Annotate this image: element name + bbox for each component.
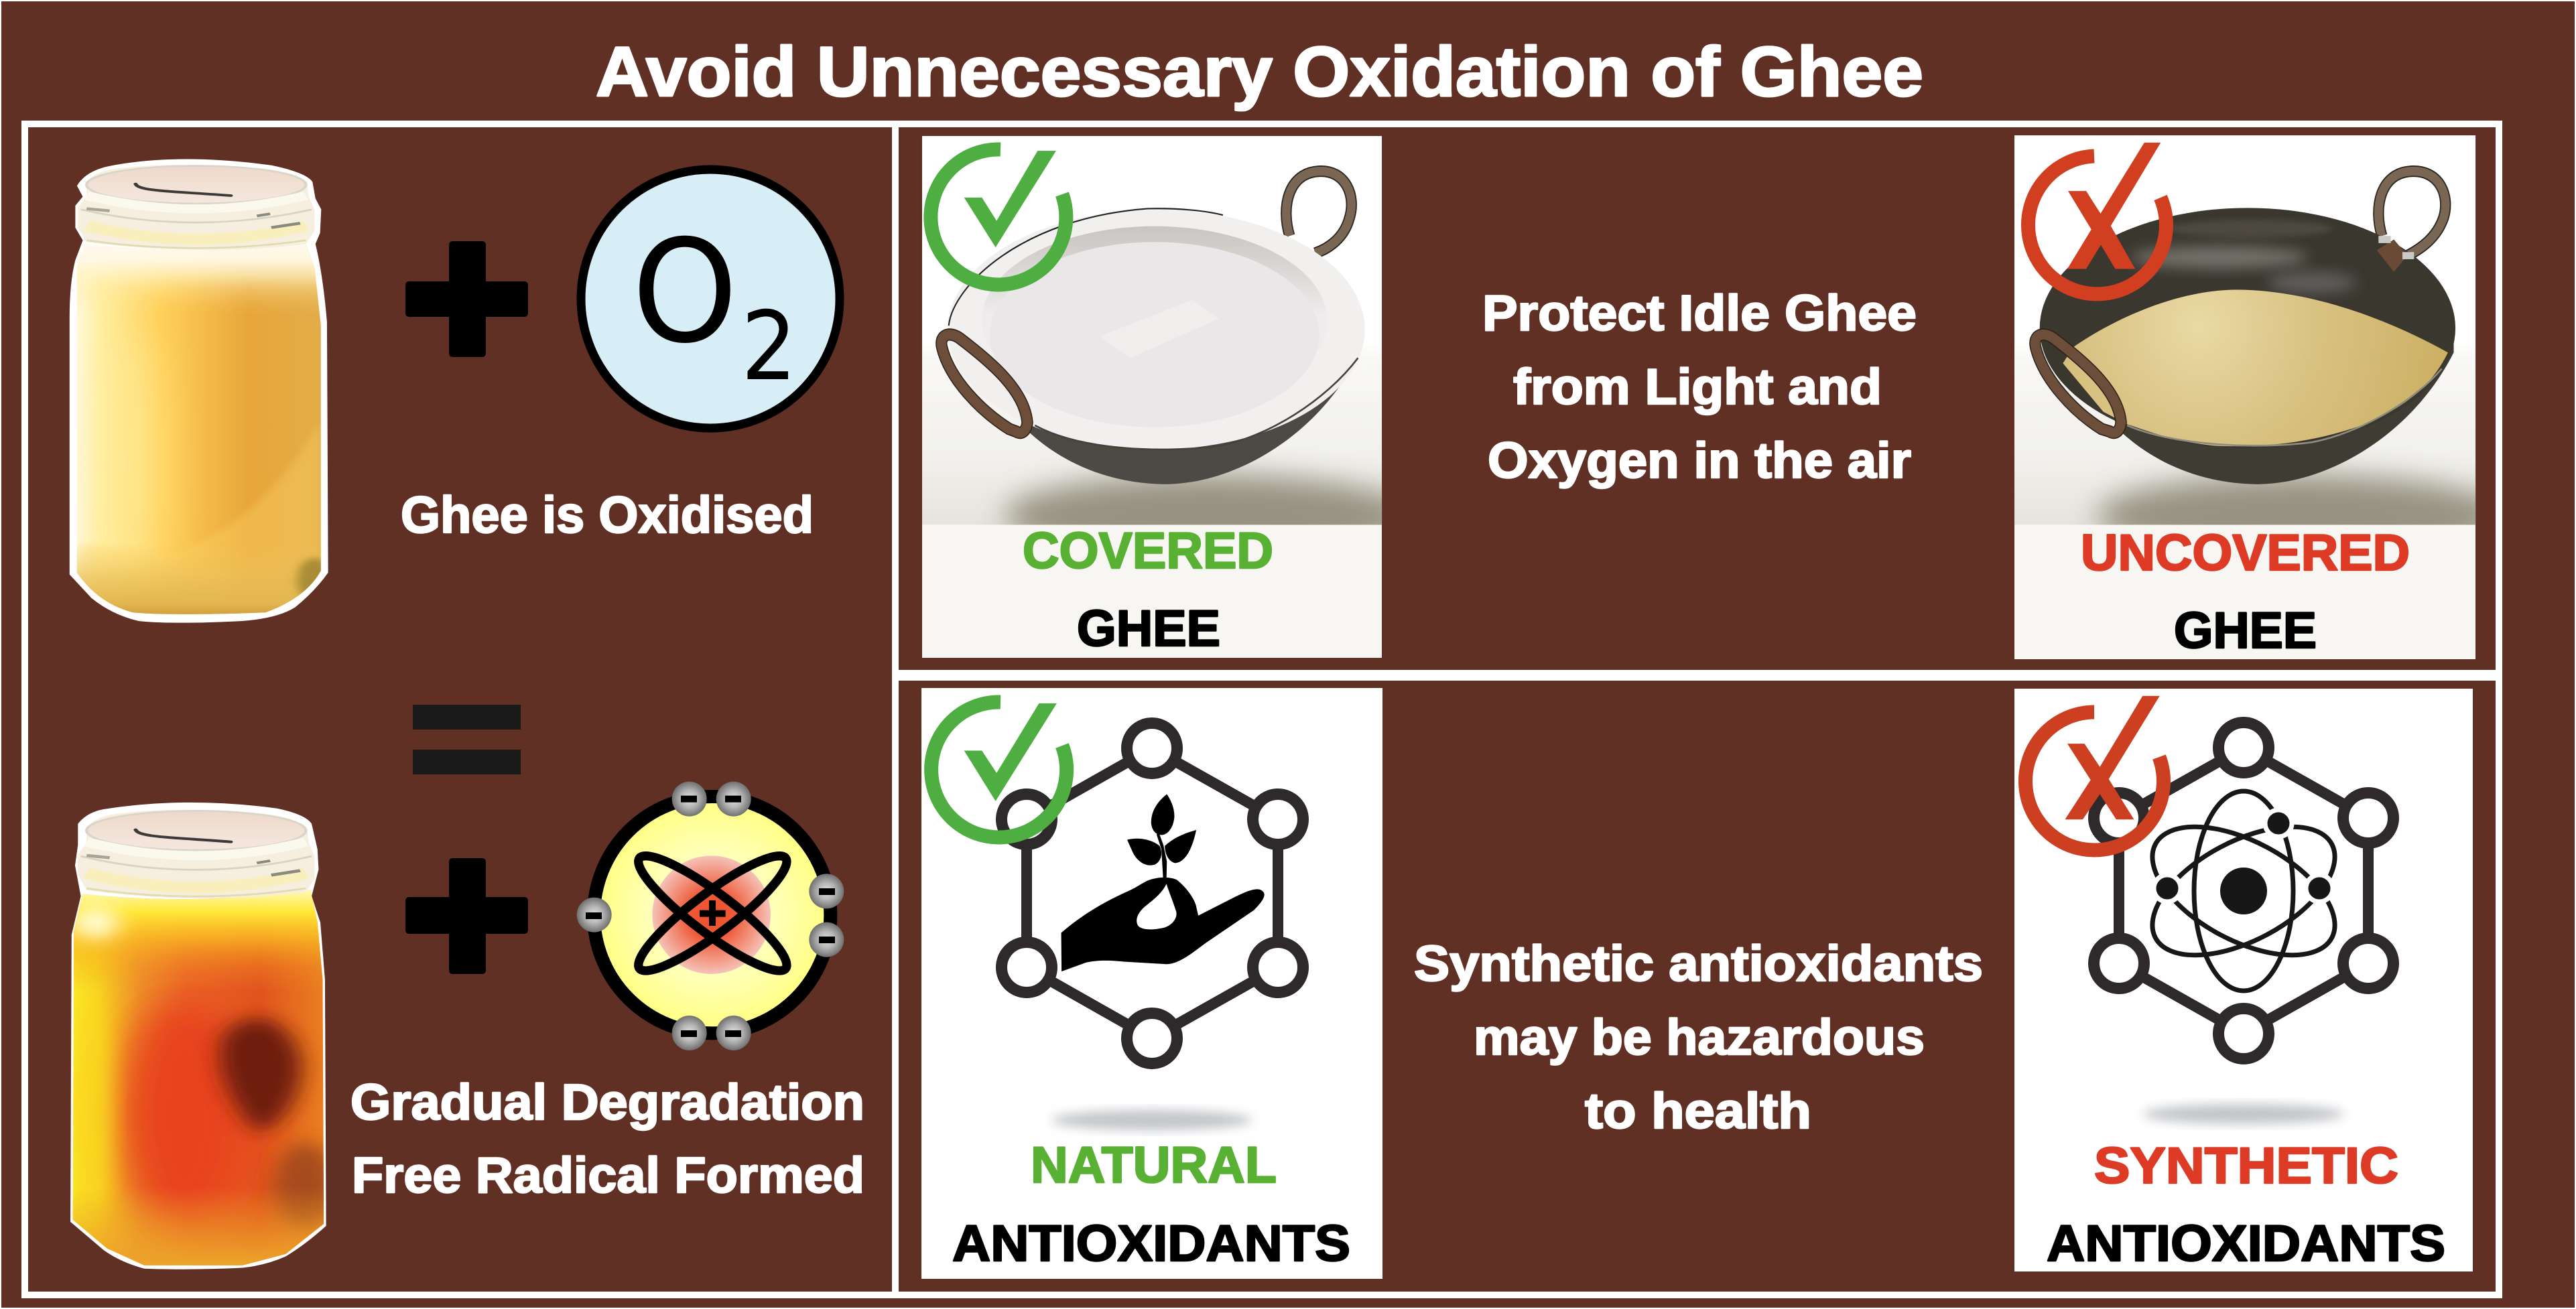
label: covered ghee: COVERED — [1023, 523, 1273, 579]
image: covered kadai pan — [922, 137, 1382, 525]
text: protect idle ghee: Protect Idle Ghee — [1482, 285, 1917, 341]
icon: oxygen molecule O2: 2 — [741, 291, 797, 402]
label: synthetic antioxidants: SYNTHETIC — [2094, 1138, 2398, 1194]
text: gradual degradation, free radical formed — [350, 1074, 864, 1203]
icon: red cross — [2028, 143, 2166, 294]
icon: plus — [405, 858, 528, 974]
label: uncovered ghee — [2081, 525, 2410, 659]
icon: free radical atom — [577, 782, 844, 1050]
panel: natural antioxidants card — [921, 688, 1382, 1279]
icon: plus — [405, 241, 528, 357]
text: synthetic antioxidants warning: Synthetic antioxidants — [1414, 935, 1983, 991]
icon: hexagon molecule with atom — [2094, 722, 2394, 1124]
label: synthetic antioxidants: ANTIOXIDANTS — [2047, 1215, 2445, 1272]
panel: covered ghee card — [922, 136, 1415, 658]
icon: oxygen molecule O2 — [581, 169, 840, 428]
text: synthetic antioxidants warning: to health — [1585, 1083, 1811, 1139]
text: protect idle ghee: Oxygen in the air — [1488, 432, 1911, 488]
text: ghee is oxidised: Ghee is Oxidised — [401, 486, 814, 544]
label: covered ghee: GHEE — [1077, 600, 1220, 657]
icon: red cross — [2025, 696, 2163, 850]
icon: green check — [931, 149, 1066, 285]
image: uncovered kadai pan with ghee — [2014, 135, 2475, 525]
title: Avoid Unnecessary Oxidation of Ghee — [596, 33, 1923, 111]
text: gradual degradation, free radical formed: Gradual Degradation — [350, 1074, 864, 1130]
jar: fresh golden ghee — [70, 159, 328, 623]
label: natural antioxidants: NATURAL — [1031, 1137, 1277, 1194]
icon: green check — [931, 702, 1067, 837]
text: synthetic antioxidants warning: may be hazardous — [1474, 1009, 1925, 1065]
text: synthetic antioxidants warning — [1414, 935, 1983, 1139]
text: protect idle ghee: from Light and — [1513, 358, 1882, 415]
label: natural antioxidants: ANTIOXIDANTS — [952, 1215, 1350, 1272]
label: synthetic antioxidants — [2047, 1138, 2445, 1272]
label: uncovered ghee: UNCOVERED — [2081, 525, 2410, 581]
panel: synthetic antioxidants card — [2014, 689, 2473, 1272]
icon: hexagon molecule with hand and plant — [1001, 724, 1303, 1130]
icon: oxygen molecule O2: O — [632, 209, 738, 374]
icon: equals sign — [413, 705, 521, 774]
text: gradual degradation, free radical formed: Free Radical Formed — [352, 1147, 864, 1203]
panel: uncovered ghee card — [2014, 135, 2507, 659]
label: covered ghee — [1023, 523, 1273, 657]
label: natural antioxidants — [952, 1137, 1350, 1272]
jar: oxidised dark ghee — [69, 803, 338, 1269]
text: protect idle ghee — [1482, 285, 1917, 488]
label: uncovered ghee: GHEE — [2174, 602, 2317, 659]
panel: oxidation equation — [23, 159, 864, 1269]
